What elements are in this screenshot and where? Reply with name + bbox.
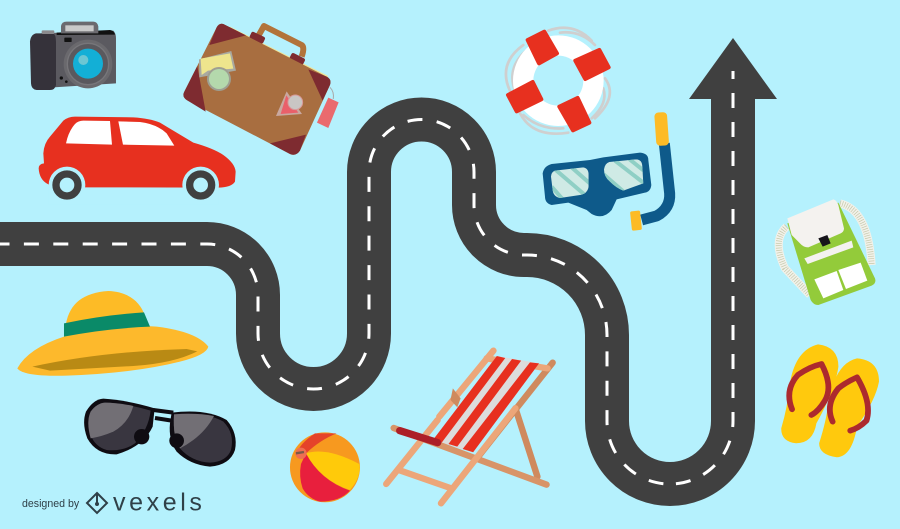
icon: deck chair xyxy=(386,351,553,503)
logo: designed by vexels xyxy=(22,488,205,516)
road with arrow xyxy=(0,38,777,484)
logo: designed by vexels: designed by xyxy=(22,498,80,510)
icon: snorkel mask xyxy=(543,112,670,231)
icon: suitcase xyxy=(183,24,339,155)
logo: designed by vexels: vexels xyxy=(113,488,205,516)
icon: car xyxy=(39,117,236,205)
icon: sunglasses xyxy=(84,399,236,467)
icon: backpack xyxy=(779,199,875,305)
icon: beach ball xyxy=(290,432,360,502)
icon: camera xyxy=(30,22,116,90)
icon: sun hat xyxy=(17,291,208,376)
icon: flip flops xyxy=(781,344,879,457)
icon: lifebuoy xyxy=(506,28,610,134)
